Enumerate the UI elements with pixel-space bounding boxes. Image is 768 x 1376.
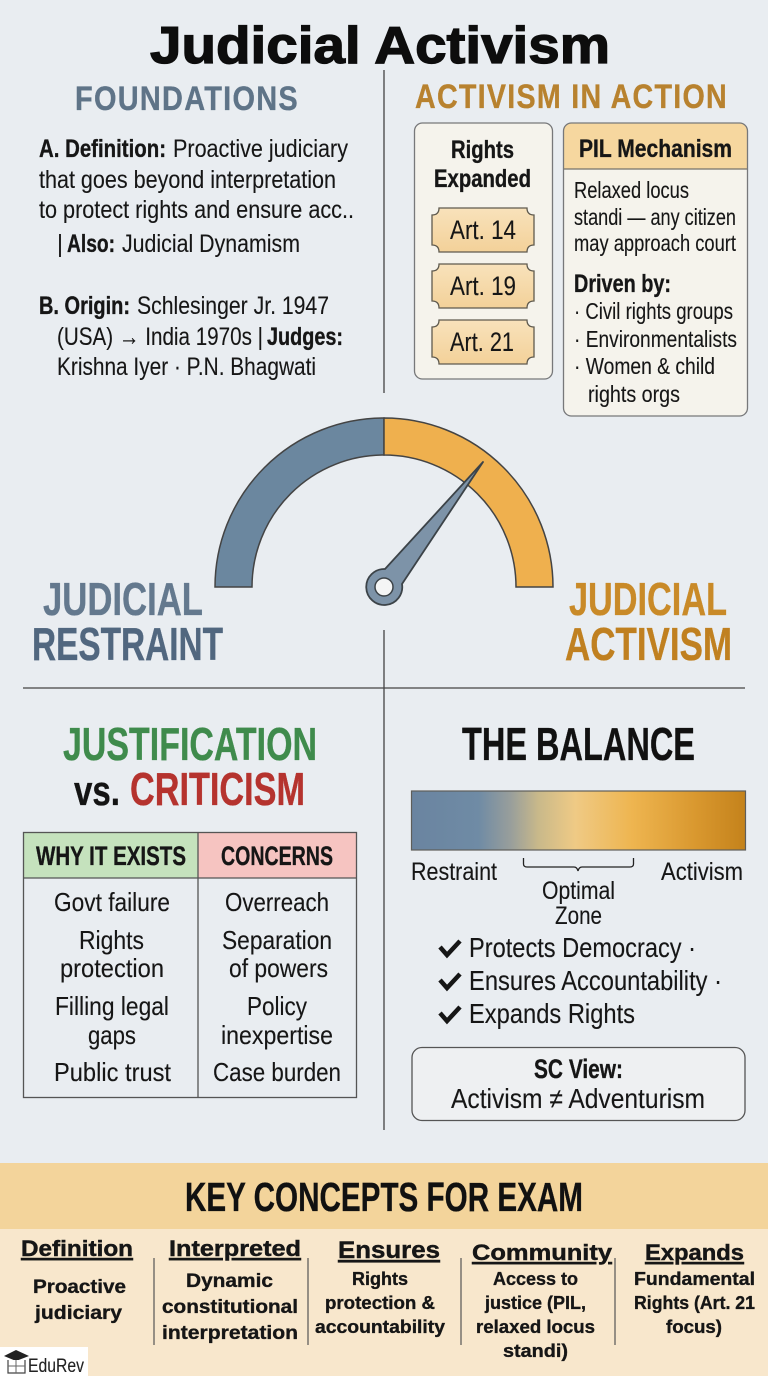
card: rights expanded: Art. 14 bbox=[450, 215, 516, 245]
text block: definition: Proactive judiciary bbox=[173, 135, 348, 163]
concept: community: justice (PIL, bbox=[484, 1293, 586, 1313]
chart: balance gradient bar: Zone bbox=[555, 902, 602, 930]
table: why it exists and concerns: gaps bbox=[88, 1020, 136, 1050]
text block: origin: (USA) → India 1970s | bbox=[57, 323, 263, 351]
text block: definition: Also: bbox=[67, 230, 115, 258]
heading: foundations: FOUNDATIONS bbox=[75, 80, 299, 118]
table: why it exists and concerns: protection bbox=[60, 953, 164, 983]
text block: definition: Judicial Dynamism bbox=[122, 230, 300, 258]
table: why it exists and concerns: WHY IT EXISTS bbox=[36, 841, 186, 871]
text block: origin bbox=[39, 292, 343, 381]
panel: justification vs criticism bbox=[23, 718, 357, 1098]
table: why it exists and concerns: Public trust bbox=[54, 1057, 172, 1087]
table: why it exists and concerns: CONCERNS bbox=[221, 841, 333, 871]
heading: key concepts: KEY CONCEPTS FOR EXAM bbox=[185, 1174, 583, 1220]
table: why it exists and concerns: Overreach bbox=[225, 887, 329, 917]
heading: justification vs criticism: JUSTIFICATION bbox=[63, 718, 317, 770]
label: judicial restraint bbox=[32, 573, 223, 670]
concept: definition: Proactive bbox=[33, 1277, 126, 1298]
card: PIL mechanism: rights orgs bbox=[588, 381, 680, 407]
table: why it exists and concerns: Rights bbox=[79, 925, 144, 955]
concept: definition: judiciary bbox=[34, 1303, 122, 1324]
list: balance benefits: Protects Democracy · bbox=[469, 932, 696, 963]
card: rights expanded: Art. 19 bbox=[450, 271, 516, 301]
card: PIL mechanism bbox=[564, 123, 748, 416]
text block: origin: Schlesinger Jr. 1947 bbox=[137, 292, 329, 320]
callout: SC view bbox=[412, 1048, 745, 1120]
card: rights expanded: Art. 21 bbox=[450, 327, 514, 357]
list: balance benefits bbox=[440, 932, 722, 1029]
concept: community: standi) bbox=[503, 1341, 568, 1361]
title: Judicial Activism bbox=[150, 17, 610, 75]
card: PIL mechanism: · Civil rights groups bbox=[574, 298, 733, 324]
concept: expands: Expands bbox=[645, 1240, 744, 1265]
concept: definition: Definition bbox=[21, 1236, 133, 1261]
text block: definition bbox=[39, 135, 354, 258]
table: why it exists and concerns: Filling legal bbox=[55, 991, 169, 1021]
card: PIL mechanism: · Women & child bbox=[574, 353, 715, 379]
concept: expands: focus) bbox=[666, 1317, 722, 1337]
concept: interpreted: Dynamic bbox=[186, 1271, 273, 1292]
heading: justification vs criticism: vs. bbox=[74, 767, 120, 814]
text block: definition: A. Definition: bbox=[39, 135, 166, 163]
callout: SC view: Activism ≠ Adventurism bbox=[451, 1083, 705, 1114]
logo: EduRev bbox=[0, 1347, 88, 1376]
callout: SC view: SC View: bbox=[534, 1054, 623, 1084]
card: rights expanded bbox=[414, 123, 552, 379]
table: why it exists and concerns: Govt failure bbox=[54, 887, 170, 917]
concept: ensures: Ensures bbox=[338, 1237, 440, 1264]
panel: the balance bbox=[411, 718, 746, 1120]
card: rights expanded: Expanded bbox=[434, 165, 531, 193]
concept: expands bbox=[634, 1240, 755, 1337]
label: judicial restraint: RESTRAINT bbox=[32, 618, 223, 670]
panel: key concepts for exam bbox=[0, 1163, 768, 1376]
concept: community: relaxed locus bbox=[476, 1317, 595, 1337]
list: balance benefits: Expands Rights bbox=[469, 998, 635, 1029]
text block: origin: Krishna Iyer · P.N. Bhagwati bbox=[57, 353, 316, 381]
icon: gauge needle bbox=[366, 462, 483, 605]
table: why it exists and concerns: Case burden bbox=[213, 1057, 341, 1087]
card: PIL mechanism: PIL Mechanism bbox=[579, 135, 732, 163]
chart: restraint-activism gauge bbox=[215, 418, 553, 605]
concept: interpreted bbox=[162, 1236, 301, 1344]
chart: balance gradient bar: Activism bbox=[661, 858, 743, 886]
label: judicial activism bbox=[565, 573, 732, 670]
table: why it exists and concerns: Policy bbox=[247, 991, 307, 1021]
concept: ensures: accountability bbox=[315, 1317, 445, 1337]
table: why it exists and concerns: of powers bbox=[229, 953, 328, 983]
panel: activism in action bbox=[414, 78, 748, 416]
concept: expands: Rights (Art. 21 bbox=[634, 1293, 755, 1313]
list: balance benefits: Ensures Accountability · bbox=[469, 965, 722, 996]
heading: justification vs criticism: CRITICISM bbox=[130, 763, 305, 815]
concept: expands: Fundamental bbox=[634, 1269, 755, 1289]
chart: balance gradient bar: Optimal bbox=[542, 877, 615, 905]
text block: definition: that goes beyond interpretation bbox=[39, 166, 336, 194]
text block: definition: to protect rights and ensure acc.. bbox=[39, 196, 354, 224]
concept: interpreted: interpretation bbox=[162, 1323, 298, 1344]
text block: origin: Judges: bbox=[267, 323, 343, 351]
text block: definition: | bbox=[57, 230, 63, 258]
concept: definition bbox=[21, 1236, 133, 1324]
concept: interpreted: constitutional bbox=[162, 1297, 298, 1318]
heading: justification vs criticism bbox=[63, 718, 317, 815]
concept: ensures: protection & bbox=[325, 1293, 435, 1313]
concept: ensures bbox=[315, 1237, 445, 1337]
concept: community: Community bbox=[472, 1240, 613, 1265]
concept: community bbox=[472, 1240, 613, 1361]
label: judicial restraint: JUDICIAL bbox=[43, 573, 203, 625]
concept: ensures: Rights bbox=[352, 1269, 408, 1289]
panel: foundations bbox=[39, 80, 354, 381]
card: PIL mechanism: Relaxed locus bbox=[574, 177, 689, 203]
table: why it exists and concerns bbox=[23, 832, 357, 1098]
card: PIL mechanism: · Environmentalists bbox=[574, 326, 737, 352]
text block: origin: B. Origin: bbox=[39, 292, 130, 320]
chart: balance gradient bar: Restraint bbox=[411, 858, 497, 886]
concept: community: Access to bbox=[493, 1269, 578, 1289]
table: why it exists and concerns: inexpertise bbox=[221, 1020, 333, 1050]
card: rights expanded: Rights bbox=[451, 136, 514, 164]
card: PIL mechanism: Driven by: bbox=[574, 270, 671, 298]
concept: interpreted: Interpreted bbox=[169, 1236, 301, 1261]
table: why it exists and concerns: Separation bbox=[222, 925, 332, 955]
chart: balance gradient bar bbox=[411, 791, 746, 930]
